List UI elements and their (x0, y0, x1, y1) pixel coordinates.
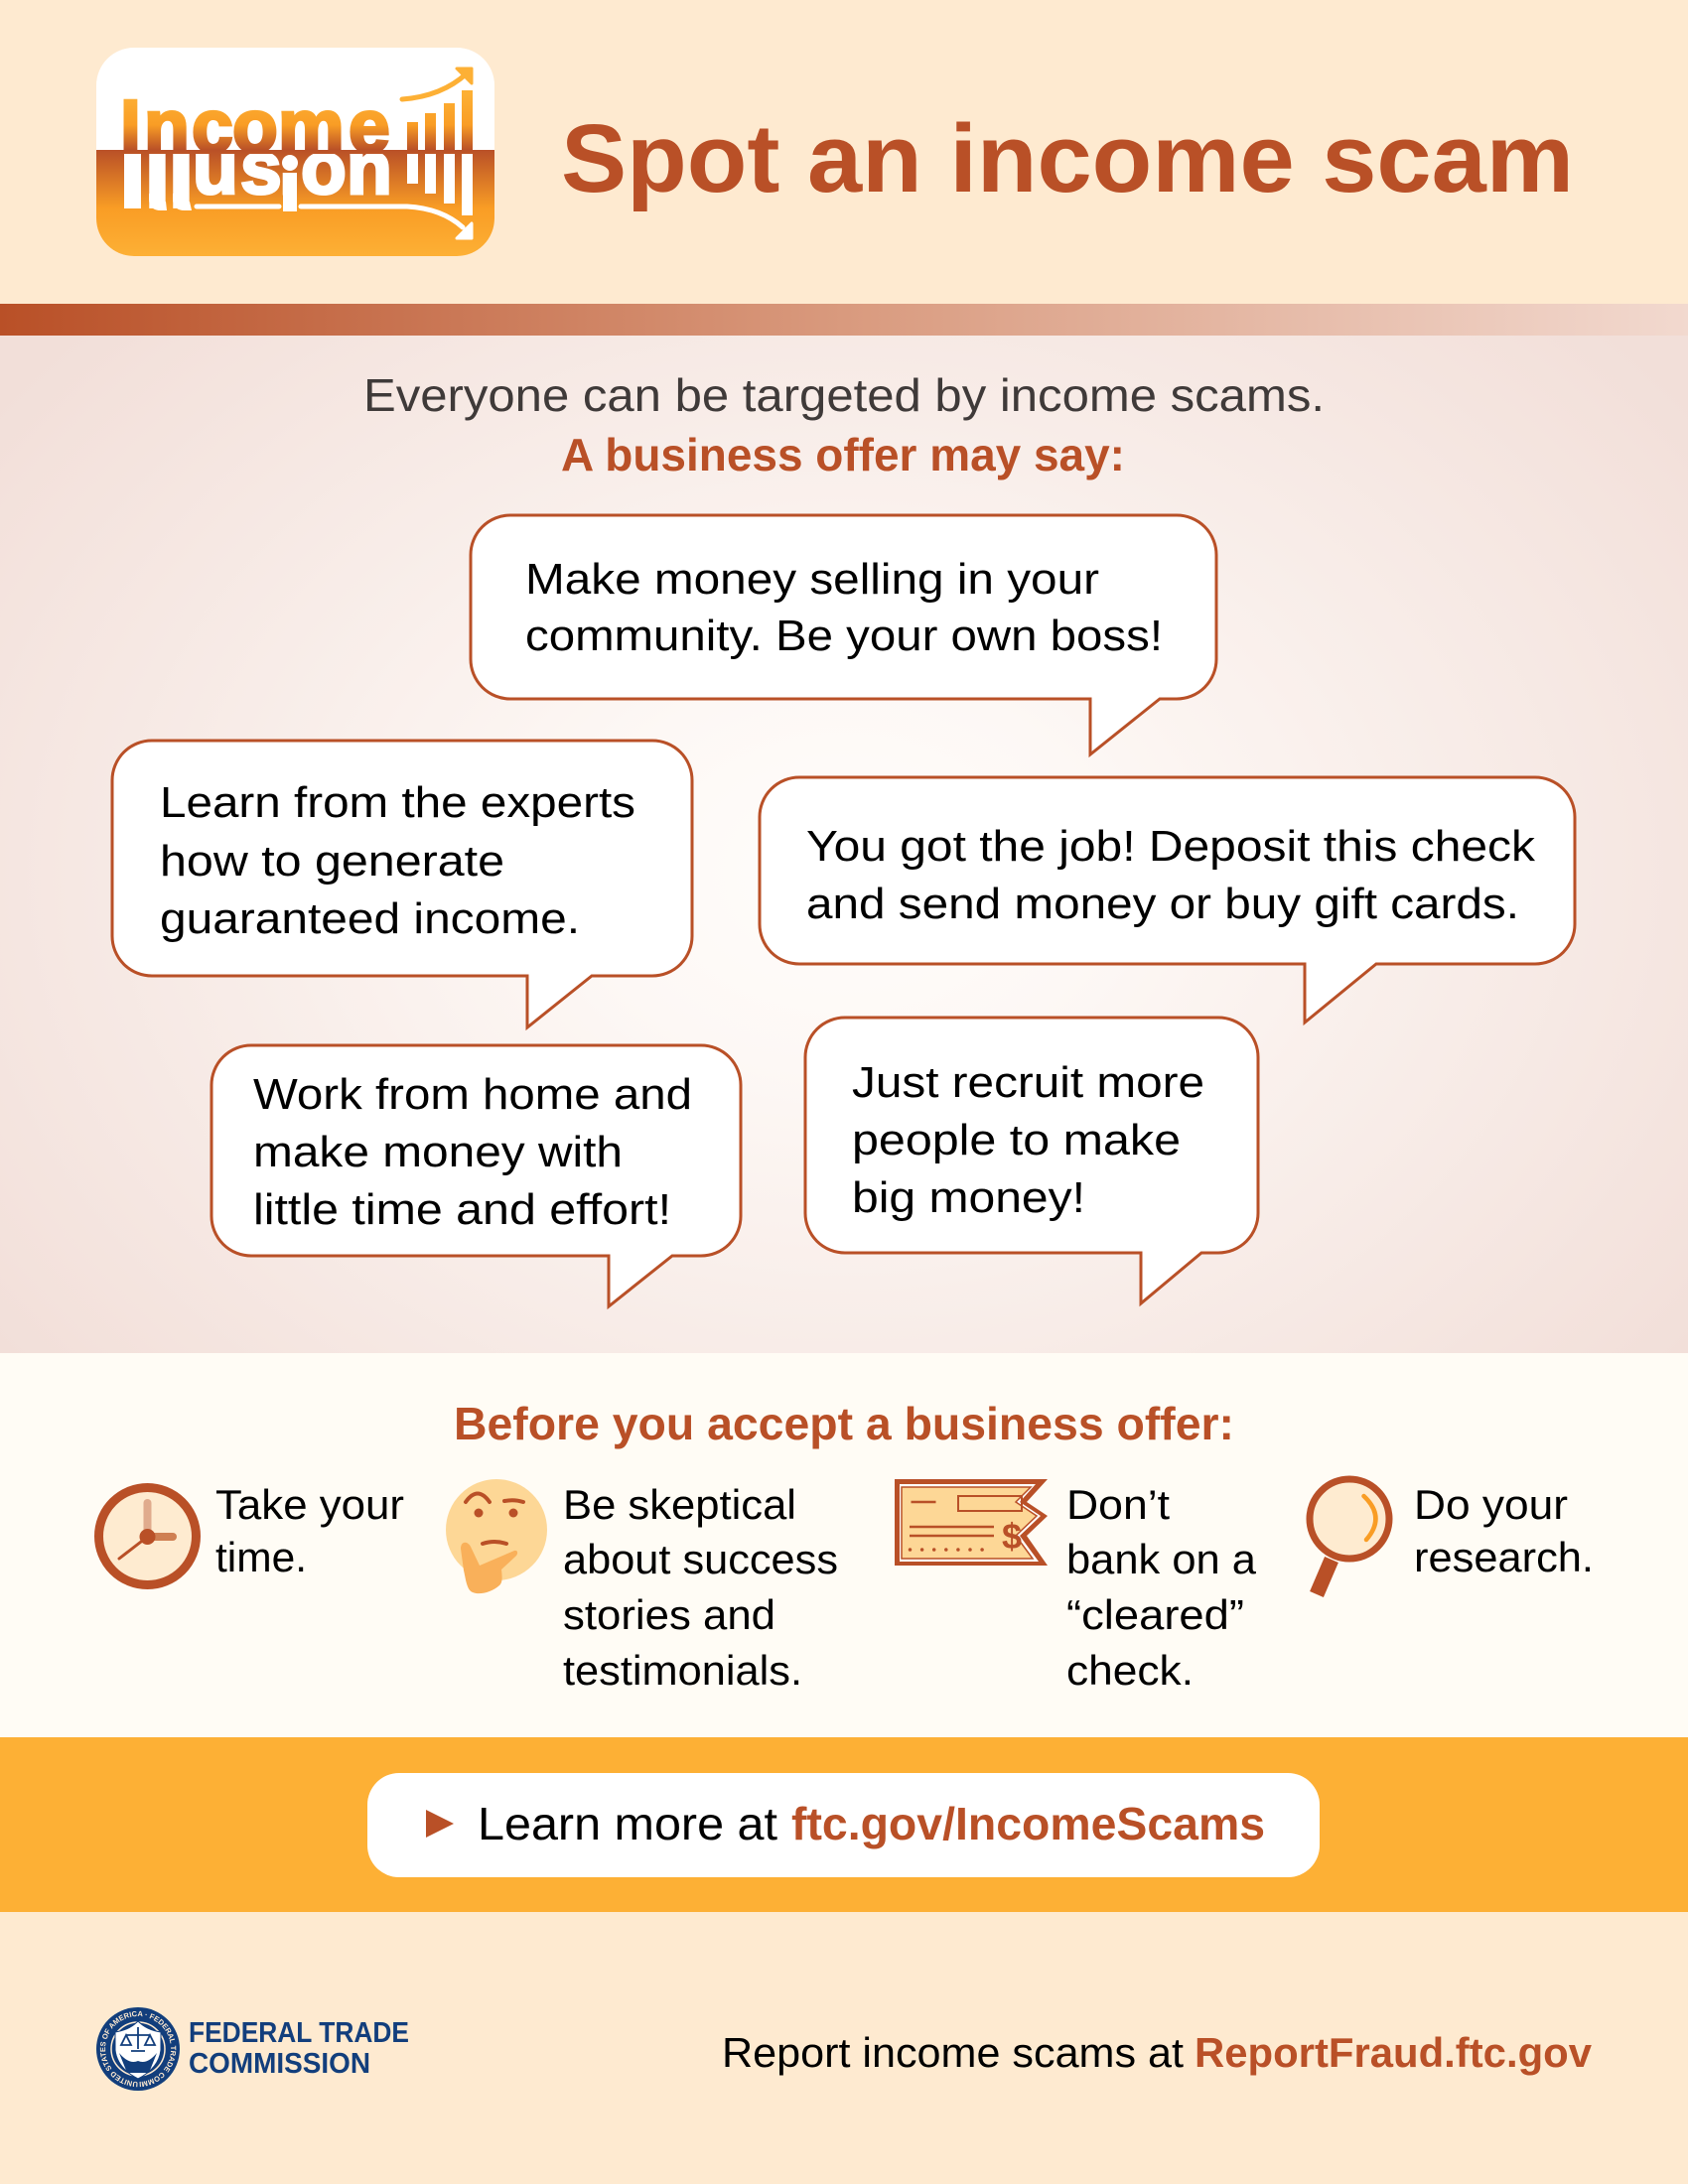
speech bubble: deposit this check (760, 777, 1575, 1023)
speech bubble: learn from the experts: Learn from the experts (160, 778, 635, 827)
tip: do your research: Do your (1414, 1481, 1568, 1528)
logo: Income Illusion (96, 48, 494, 256)
tip: be skeptical: about success (563, 1536, 838, 1582)
tip: be skeptical: Be skeptical (563, 1481, 796, 1528)
tip: take your time (215, 1481, 404, 1580)
logo: Income Illusion: Income (120, 84, 390, 168)
icon: magnifying glass (1310, 1479, 1389, 1594)
speech bubble: learn from the experts: how to generate (160, 837, 504, 886)
icon: check (895, 1479, 1048, 1566)
speech bubble: learn from the experts (112, 741, 692, 1027)
icon: clock (99, 1487, 197, 1584)
link text: Learn more at (478, 1798, 777, 1849)
speech bubble: recruit more people: people to make (852, 1116, 1181, 1164)
tip: cleared check: bank on a (1066, 1536, 1257, 1582)
tip: take your time: time. (215, 1534, 307, 1580)
title: Spot an income scam (561, 104, 1574, 212)
tip: cleared check (1066, 1481, 1257, 1694)
speech bubble: sell in your community (471, 515, 1216, 754)
logo: FTC seal: UNITED STATES OF AMERICA · FEDERAL TRADE COMMISSION (99, 2011, 177, 2087)
panel: before you accept (0, 1353, 1688, 1737)
speech bubble: sell in your community: Make money selling in your (525, 555, 1099, 604)
speech bubble: deposit this check: and send money or buy gift cards. (806, 880, 1519, 928)
tip: cleared check: “cleared” (1066, 1591, 1244, 1638)
speech bubble: learn from the experts: guaranteed income. (160, 894, 580, 943)
tip: do your research (1414, 1481, 1594, 1580)
intro text: Everyone can be targeted by income scams. (363, 369, 1325, 421)
report line: ReportFraud.ftc.gov (1195, 2029, 1593, 2076)
gradient divider bar (0, 304, 1688, 336)
tip: be skeptical: testimonials. (563, 1647, 802, 1694)
button pill (367, 1773, 1320, 1877)
FTC wordmark: FEDERAL TRADE (189, 2017, 409, 2049)
speech bubble: recruit more people: Just recruit more (852, 1058, 1204, 1107)
speech bubble: recruit more people (805, 1018, 1258, 1303)
speech bubble: work from home: Work from home and (253, 1070, 692, 1119)
logo: Income Illusion: usion (193, 126, 392, 209)
tip: cleared check: check. (1066, 1647, 1194, 1694)
header band (0, 0, 1688, 304)
tip: cleared check: Don’t (1066, 1481, 1170, 1528)
tip: be skeptical: stories and (563, 1591, 775, 1638)
icon: thinking face (446, 1479, 547, 1593)
speech bubble: work from home: make money with (253, 1128, 623, 1176)
panel: call to action band (0, 1737, 1688, 1912)
heading: Before you accept a business offer: (454, 1398, 1234, 1449)
subheading: A business offer may say: (561, 429, 1125, 480)
speech bubble: deposit this check: You got the job! Deposit this check (806, 822, 1536, 871)
icon: play arrow (426, 1810, 454, 1838)
footer band (0, 1912, 1688, 2184)
speech bubble: work from home: little time and effort! (253, 1185, 671, 1234)
report line: Report income scams at (722, 2029, 1184, 2076)
tip: do your research: research. (1414, 1534, 1594, 1580)
FTC wordmark (189, 2017, 409, 2080)
logo: FTC seal (96, 2007, 180, 2091)
speech bubble: recruit more people: big money! (852, 1173, 1085, 1222)
FTC wordmark: COMMISSION (189, 2048, 370, 2080)
tip: take your time: Take your (215, 1481, 404, 1528)
panel: business offer claims (0, 336, 1688, 1353)
link text: ftc.gov/IncomeScams (791, 1798, 1265, 1849)
tip: be skeptical (563, 1481, 838, 1694)
speech bubble: sell in your community: community. Be your own boss! (525, 612, 1163, 660)
logo: Income Illusion: Ill (120, 127, 194, 226)
speech bubble: work from home (211, 1045, 741, 1306)
icon: check: $ (1002, 1516, 1022, 1557)
